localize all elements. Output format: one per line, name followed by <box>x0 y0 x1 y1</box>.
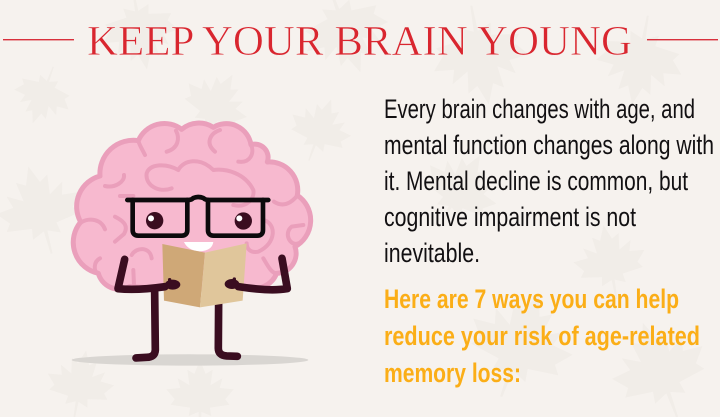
right arm <box>225 258 287 290</box>
left eye <box>146 212 163 229</box>
intro paragraph: cognitive impairment is not <box>384 202 636 232</box>
title rule right <box>647 39 718 40</box>
call to action: memory loss: <box>384 358 521 388</box>
intro paragraph <box>384 94 714 268</box>
legs <box>136 292 237 358</box>
glasses <box>127 197 268 236</box>
title rule left <box>3 39 74 40</box>
ground shadow <box>72 354 308 366</box>
brain folds <box>81 130 303 285</box>
right eye <box>235 212 252 230</box>
call to action <box>384 284 700 388</box>
title text: KEEP YOUR BRAIN YOUNG <box>87 19 632 65</box>
brain body <box>73 123 311 289</box>
brain character reading a book <box>72 123 311 366</box>
smile <box>184 242 213 251</box>
left arm <box>118 259 180 290</box>
open book <box>162 243 247 307</box>
intro paragraph: inevitable. <box>384 238 480 268</box>
